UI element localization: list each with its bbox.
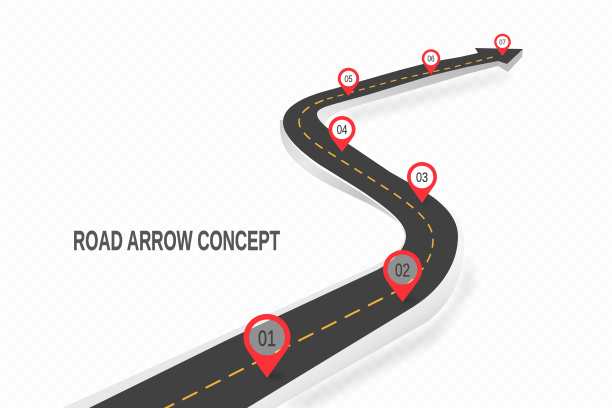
road with walls bbox=[62, 48, 523, 408]
pin 01 bbox=[244, 314, 290, 378]
pin shadows bbox=[264, 200, 431, 379]
pin 06: 06 bbox=[428, 54, 435, 64]
kerb along the lower road bbox=[62, 254, 395, 408]
pin 04 bbox=[328, 116, 356, 152]
pin 05: 05 bbox=[344, 74, 352, 85]
pin 02 bbox=[383, 250, 422, 302]
pin 05 bbox=[338, 68, 359, 96]
pin 02: 02 bbox=[395, 260, 410, 280]
arrowhead wall bbox=[498, 49, 523, 72]
centre line: upper stretch bbox=[327, 57, 493, 99]
centre line: S curve bbox=[299, 99, 433, 293]
pin 07: 07 bbox=[499, 40, 506, 46]
road cast shadow bbox=[280, 72, 514, 408]
far wall: upper and middle curve bbox=[280, 120, 408, 266]
outer wall of lower road bbox=[247, 207, 464, 408]
pin 01: 01 bbox=[258, 326, 276, 351]
title: ROAD ARROW CONCEPT bbox=[73, 225, 280, 256]
centre line: lower stretch bbox=[160, 293, 393, 408]
inner wall below the upper road bbox=[316, 60, 498, 131]
pin 07 bbox=[494, 34, 511, 56]
asphalt road surface bbox=[89, 48, 523, 408]
pin 03 bbox=[407, 162, 437, 203]
pin 06 bbox=[422, 49, 440, 75]
pin 04: 04 bbox=[337, 123, 347, 137]
pin 03: 03 bbox=[416, 169, 428, 185]
